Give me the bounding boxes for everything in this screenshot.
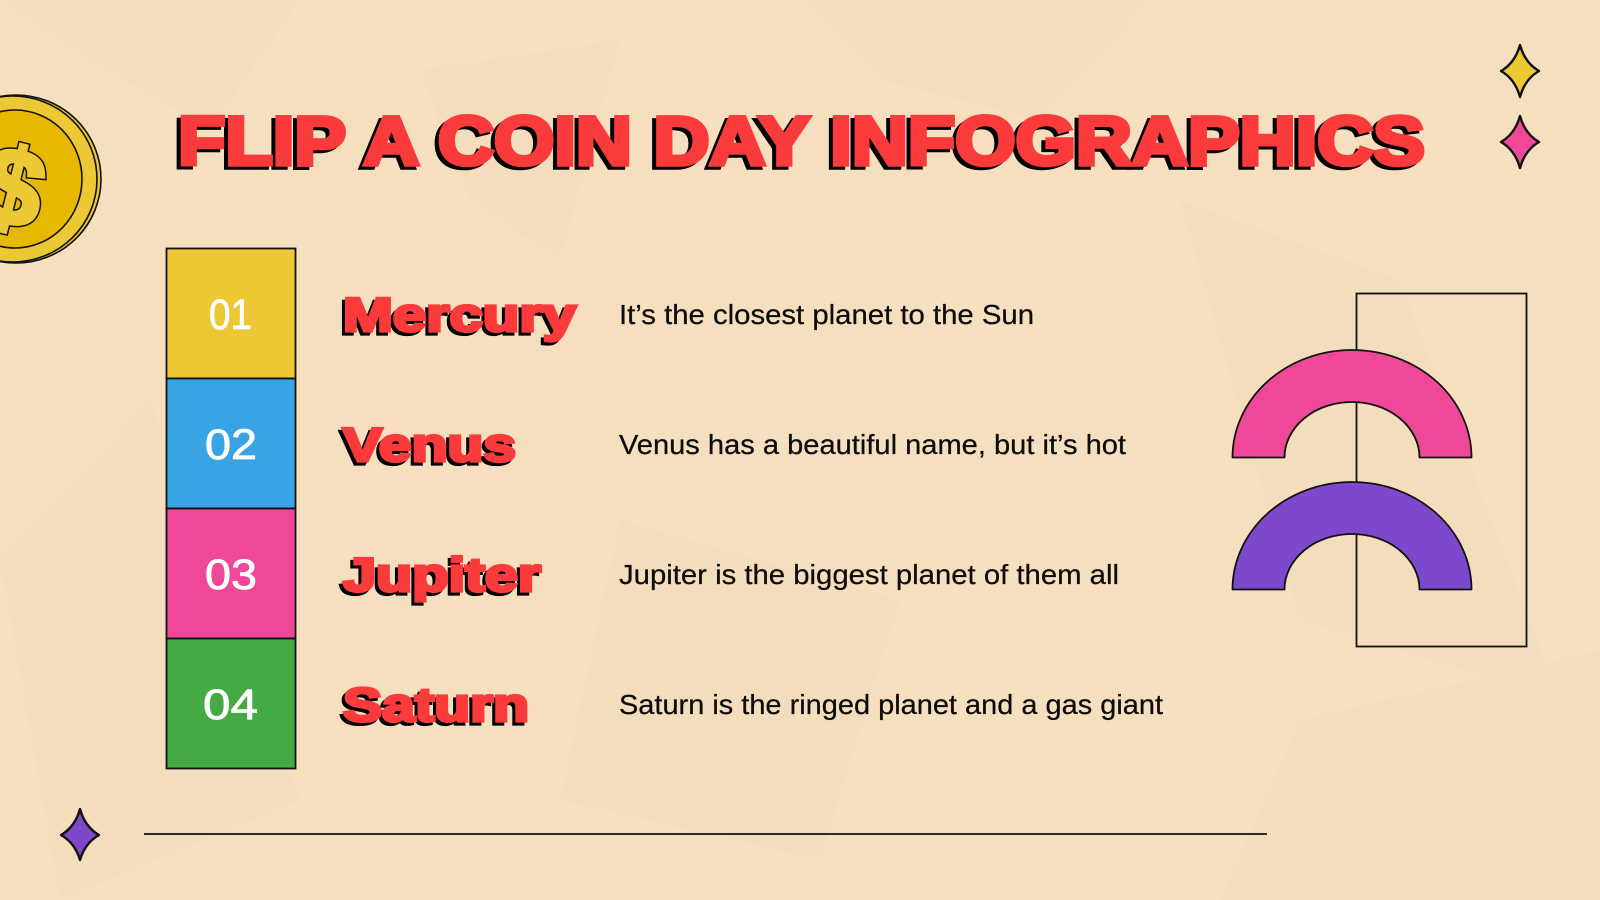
number block 03 <box>166 508 296 638</box>
number block 04: 04 <box>203 681 258 729</box>
icon: yellow sparkle <box>1501 45 1539 97</box>
text: Mercury description: It’s the closest planet to the Sun <box>619 299 1034 330</box>
heading: Jupiter: Jupiter <box>343 548 541 601</box>
icon: gold dollar coin <box>0 95 101 263</box>
text: Jupiter description: Jupiter is the biggest planet of them all <box>619 559 1119 590</box>
number block 01 <box>166 248 296 378</box>
panel: numbered colour column <box>166 248 296 768</box>
icon: pink arch <box>1232 350 1472 458</box>
text: Venus description: Venus has a beautiful name, but it’s hot <box>619 429 1126 460</box>
number block 01: 01 <box>209 291 252 339</box>
icon: purple arch <box>1232 482 1472 590</box>
heading: Saturn: Saturn <box>343 678 529 731</box>
icon: purple sparkle <box>61 809 99 860</box>
number block 02: 02 <box>205 421 257 469</box>
text: Saturn description: Saturn is the ringed planet and a gas giant <box>619 689 1163 720</box>
heading: Venus: Venus <box>343 418 516 471</box>
number block 04 <box>166 638 296 768</box>
icon: pink sparkle <box>1501 116 1539 168</box>
title: FLIP A COIN DAY INFOGRAPHICS <box>178 102 1425 180</box>
decorative outline rectangle <box>1356 294 1526 646</box>
heading: Mercury: Mercury <box>343 288 576 341</box>
number block 03: 03 <box>205 551 257 599</box>
number block 02 <box>166 378 296 508</box>
